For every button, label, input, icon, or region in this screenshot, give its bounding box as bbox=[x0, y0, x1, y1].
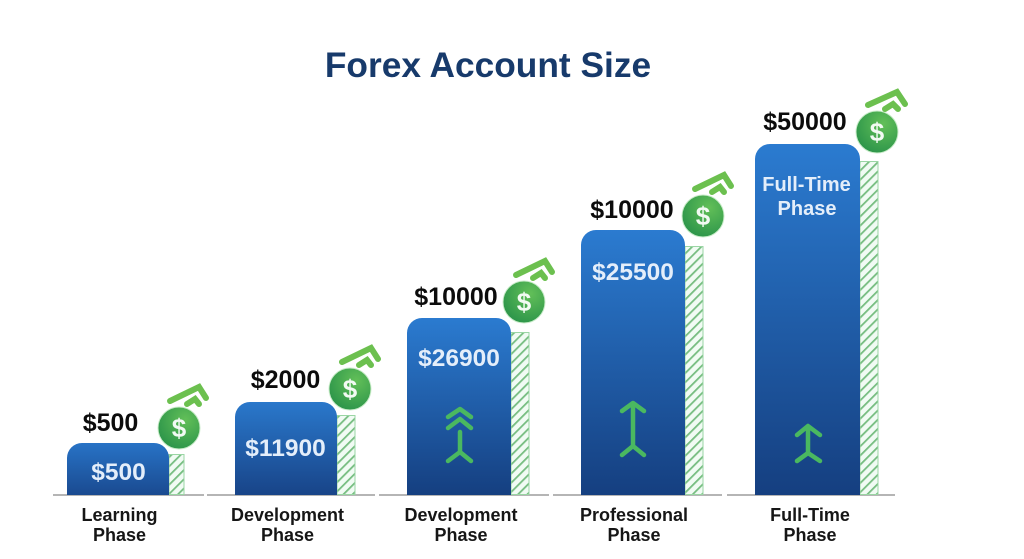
blue bar bbox=[67, 443, 169, 495]
category label: Learning bbox=[81, 505, 158, 525]
column: Professional Phase $10000 bbox=[580, 175, 731, 545]
icon: growth arrow bbox=[622, 403, 644, 455]
category label: Phase bbox=[93, 525, 146, 545]
category label: Development bbox=[231, 505, 344, 525]
blue bar bbox=[755, 144, 860, 495]
category label: Phase bbox=[434, 525, 488, 545]
icon: dollar coin with arrow: $ bbox=[870, 117, 885, 147]
icon: dollar coin with arrow bbox=[158, 387, 206, 449]
top value: $50000 bbox=[763, 108, 847, 136]
bar value: $500 bbox=[91, 459, 146, 486]
top value: $500 bbox=[83, 409, 138, 437]
column: Learning Phase $500 bbox=[67, 387, 206, 545]
icon: dollar coin with arrow bbox=[682, 175, 731, 237]
bar value: $26900 bbox=[418, 345, 500, 372]
category label: Phase bbox=[261, 525, 314, 545]
icon: dollar coin with arrow: $ bbox=[517, 287, 532, 317]
icon: growth arrow bbox=[448, 409, 471, 461]
category label: Development bbox=[404, 505, 518, 525]
icon: growth arrow bbox=[797, 426, 820, 461]
icon: dollar coin with arrow: $ bbox=[696, 201, 711, 231]
blue bar bbox=[581, 230, 685, 495]
bar value: $25500 bbox=[592, 259, 674, 286]
hatched bar bbox=[685, 246, 703, 494]
icon: dollar coin with arrow: $ bbox=[172, 413, 187, 443]
bar label: Full-Time bbox=[762, 174, 851, 196]
bar label: Phase bbox=[778, 198, 836, 220]
title: Forex Account Size bbox=[325, 46, 651, 85]
hatched bar bbox=[169, 454, 184, 494]
blue bar bbox=[407, 318, 511, 495]
category label: Phase bbox=[607, 525, 661, 545]
category label: Phase bbox=[783, 525, 837, 545]
icon: dollar coin with arrow bbox=[329, 348, 378, 410]
top value: $10000 bbox=[590, 196, 674, 224]
column: Development Phase $2000 bbox=[231, 348, 378, 545]
top value: $10000 bbox=[414, 283, 498, 311]
hatched bar bbox=[860, 162, 878, 494]
icon: dollar coin with arrow: $ bbox=[343, 374, 358, 404]
icon: dollar coin with arrow bbox=[503, 261, 552, 323]
category label: Professional bbox=[580, 505, 688, 525]
column: Development Phase $10000 bbox=[404, 261, 552, 545]
icon: dollar coin with arrow bbox=[856, 92, 905, 153]
hatched bar bbox=[337, 416, 355, 494]
bar value: $11900 bbox=[245, 435, 326, 462]
hatched bar bbox=[511, 332, 529, 494]
baseline bbox=[53, 494, 895, 496]
top value: $2000 bbox=[251, 366, 320, 394]
blue bar bbox=[235, 402, 337, 495]
column: Full-Time Phase $50000 bbox=[755, 92, 905, 545]
category label: Full-Time bbox=[770, 505, 850, 525]
